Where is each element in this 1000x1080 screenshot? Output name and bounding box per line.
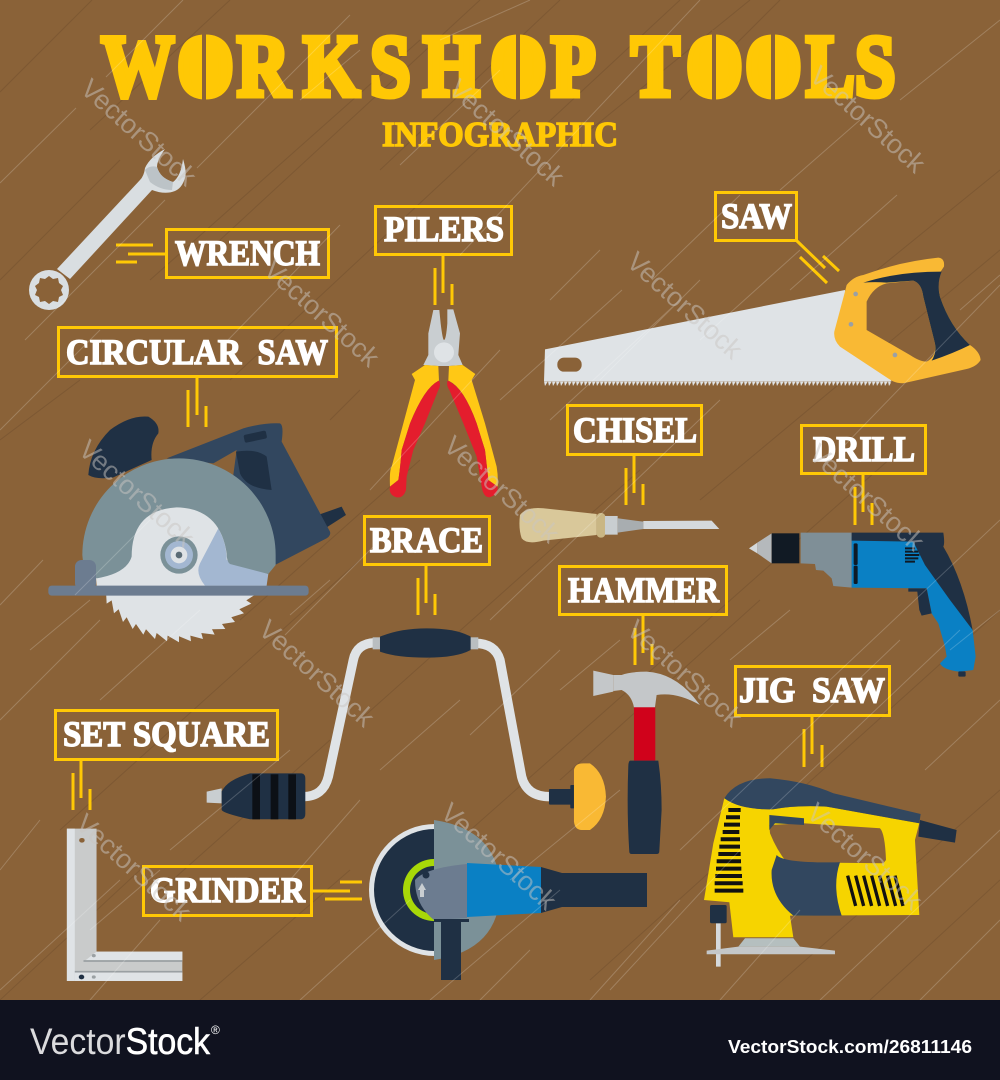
- watermarks: VectorStock: [621, 614, 748, 733]
- label: circular saw: CIRCULAR SAW: [66, 332, 328, 372]
- footer bar: ®: [211, 1023, 220, 1037]
- label: brace: [364, 516, 490, 615]
- icon: pliers: [390, 309, 498, 497]
- footer bar: [0, 1000, 1000, 1080]
- footer bar: VectorStock: [30, 1021, 210, 1062]
- icon: circular saw: [48, 416, 346, 642]
- label: set square: SET SQUARE: [63, 714, 270, 754]
- subtitle: INFOGRAPHIC: [382, 115, 618, 154]
- label: saw: SAW: [721, 196, 792, 236]
- label: circular saw: [58, 328, 336, 427]
- label: jig saw: JIG SAW: [739, 670, 885, 710]
- label: saw: [716, 192, 839, 283]
- watermarks: VectorStock: [804, 60, 931, 179]
- label: set square: [56, 710, 278, 810]
- icon: set square: [67, 829, 182, 981]
- icon: drill: [749, 533, 976, 677]
- watermarks: VectorStock: [258, 254, 385, 373]
- watermarks: VectorStock: [803, 438, 930, 557]
- label: brace: BRACE: [370, 520, 483, 560]
- icon: brace: [207, 628, 606, 830]
- footer bar: VectorStock.com/26811146: [728, 1037, 972, 1057]
- watermarks: VectorStock: [435, 797, 562, 916]
- label: wrench: WRENCH: [175, 233, 320, 273]
- label: hammer: HAMMER: [568, 570, 720, 610]
- watermarks: VectorStock: [621, 246, 748, 365]
- label: grinder: GRINDER: [150, 870, 306, 910]
- label: hammer: [560, 566, 726, 665]
- label: pliers: PILERS: [384, 209, 504, 249]
- watermarks: VectorStock: [253, 614, 380, 733]
- label: chisel: [568, 406, 702, 505]
- watermarks: VectorStock: [75, 73, 202, 192]
- label: grinder: [144, 866, 362, 916]
- label: jig saw: [736, 666, 890, 767]
- icon: wrench: [29, 149, 186, 310]
- icon: hammer: [593, 671, 700, 854]
- watermarks: VectorStock: [443, 73, 570, 192]
- label: chisel: CHISEL: [573, 410, 697, 450]
- label: wrench: [116, 230, 328, 278]
- icon: jig saw: [704, 778, 957, 967]
- watermarks: [70, 60, 931, 927]
- icon: chisel: [519, 508, 719, 542]
- watermarks: VectorStock: [438, 430, 565, 549]
- watermarks: VectorStock: [73, 434, 200, 553]
- icon: angle grinder: [369, 820, 647, 980]
- label: drill: [802, 426, 926, 525]
- label: drill: DRILL: [813, 429, 915, 469]
- watermarks: VectorStock: [70, 808, 197, 927]
- watermarks: VectorStock: [801, 797, 928, 916]
- label: pliers: [376, 206, 512, 305]
- icon: hand saw: [544, 258, 981, 386]
- title: WORKSHOPTOOLS: [101, 18, 896, 115]
